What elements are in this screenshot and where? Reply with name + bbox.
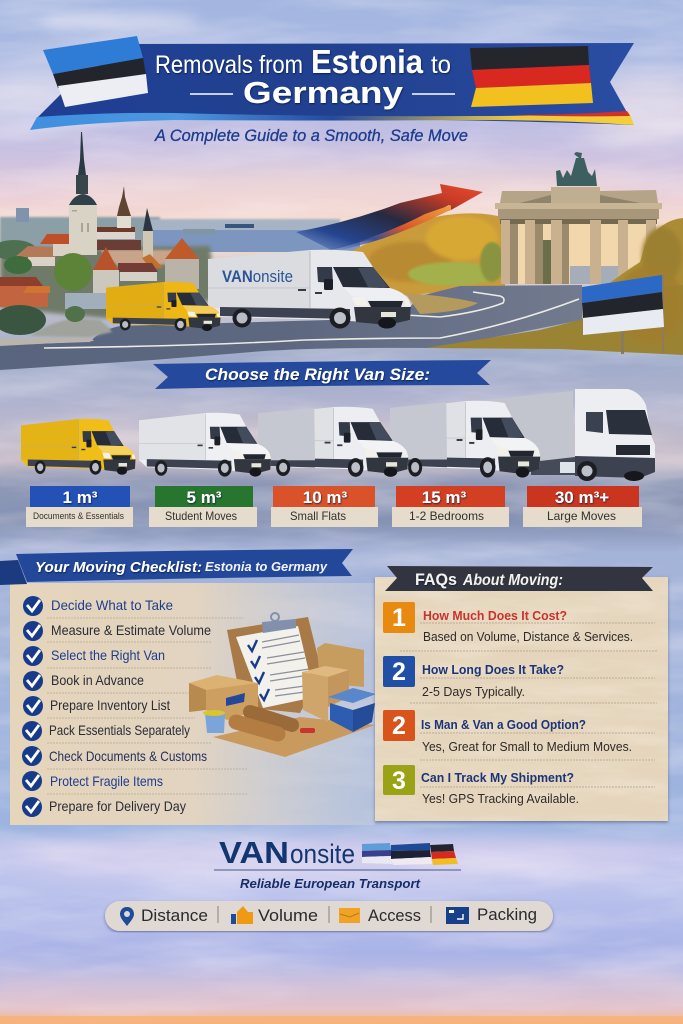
size card 15 m3: 15 m³ [422, 488, 467, 507]
ribbon [37, 43, 634, 125]
ribbon heading [153, 360, 491, 389]
check item: Measure & Estimate Volume: Measure & Estimate Volume [51, 622, 211, 638]
check item: Prepare Inventory List [23, 696, 170, 716]
title line 1: Removals from [155, 51, 303, 79]
footer logo [214, 835, 461, 891]
size card 1 m3: 1 m³ [63, 488, 98, 507]
FAQ 1 [383, 602, 633, 644]
second spire [117, 186, 131, 228]
section: choose the right van size [21, 360, 655, 527]
orange buildings left [0, 277, 50, 307]
check item: Measure & Estimate Volume [23, 621, 211, 641]
ribbon lower edge [30, 112, 634, 130]
Estonian flag [43, 36, 148, 107]
mid roofs [118, 254, 163, 281]
box van 15 m3 [390, 401, 540, 478]
size card 30 m3+: Large Moves [547, 509, 616, 523]
check item: Prepare for Delivery Day: Prepare for Delivery Day [49, 798, 186, 814]
trees and rocks [0, 253, 112, 337]
checklist heading ribbon [0, 549, 353, 585]
yellow van 1 m3 [21, 419, 135, 475]
check item: Pack Essentials Separately: Pack Essentials Separately [49, 722, 190, 738]
right trees [600, 218, 683, 352]
subtitle: A Complete Guide to a Smooth, Safe Move [154, 126, 468, 145]
title banner [30, 36, 634, 130]
paper texture [375, 577, 668, 821]
check item: Check Documents & Customs [22, 746, 207, 766]
check item: Book in Advance: Book in Advance [51, 672, 144, 688]
size card 5 m3: Student Moves [165, 509, 237, 523]
size card 15 m3 [392, 486, 509, 527]
FAQ 4: 3 [392, 767, 406, 795]
FAQ 4: Yes! GPS Tracking Available. [422, 791, 579, 806]
check item: Protect Fragile Items: Protect Fragile Items [50, 773, 163, 789]
size card 10 m3: 10 m³ [303, 488, 348, 507]
check item: Select the Right Van: Select the Right Van [51, 647, 165, 663]
check item: Prepare Inventory List: Prepare Inventory List [50, 697, 170, 713]
red accent [514, 111, 630, 116]
main church tower [69, 132, 97, 255]
red-blue direction arrow [296, 184, 483, 250]
left roofs [28, 257, 55, 266]
size card 30 m3+: 30 m³+ [555, 488, 609, 507]
ribbon heading: Choose the Right Van Size: [205, 365, 430, 384]
Access: Access [368, 906, 421, 925]
FAQ heading ribbon: About Moving: [462, 572, 563, 589]
size card 5 m3 [149, 486, 257, 527]
truck 30 m3 [483, 389, 655, 481]
illustration: clipboard and boxes [189, 613, 376, 757]
check item: Pack Essentials Separately [22, 721, 190, 741]
size card 10 m3: Small Flats [290, 509, 346, 523]
Brandenburg Gate [495, 152, 662, 284]
FAQ 1: How Much Does It Cost? [423, 608, 567, 623]
FAQ 2: How Long Does It Take? [422, 662, 564, 677]
sea and distant shore [0, 208, 360, 252]
FAQ 3: Yes, Great for Small to Medium Moves. [422, 739, 632, 754]
Distance: Distance [141, 906, 208, 925]
third tower [143, 208, 153, 260]
Estonian flag on pole [582, 275, 664, 354]
small blue buildings [65, 293, 107, 309]
Volume: Volume [258, 906, 318, 925]
Volume [231, 906, 318, 925]
autumn hill [350, 213, 505, 296]
title line 1: Estonia [311, 43, 424, 80]
check item: Book in Advance [23, 671, 144, 691]
FAQ 3: 2 [392, 712, 406, 740]
size card 30 m3+ [523, 486, 642, 527]
box van 10 m3 [258, 407, 408, 477]
FAQ heading ribbon: FAQs [415, 570, 457, 589]
white VANonsite van [208, 250, 411, 328]
Tallinn old town [0, 132, 215, 337]
Access [339, 906, 421, 925]
size card 15 m3: 1-2 Bedrooms [409, 509, 484, 523]
paper background [10, 583, 375, 825]
FAQ 2: 2 [392, 658, 406, 686]
FAQ 4 [383, 765, 579, 806]
quadriga statue [556, 152, 597, 186]
title line 1: to [431, 51, 451, 79]
flag ribbon [362, 843, 458, 865]
brand name: VAN [219, 835, 289, 870]
checklist heading ribbon: Estonia to Germany [205, 559, 328, 574]
panel: FAQs about moving [375, 566, 668, 821]
FAQ 3 [383, 710, 632, 754]
title rules [190, 93, 455, 95]
check item: Protect Fragile Items [22, 771, 163, 791]
factor pill bar [105, 901, 553, 931]
FAQ 1: Based on Volume, Distance & Services. [423, 629, 633, 644]
divider lines [400, 623, 657, 787]
panel: moving checklist [0, 549, 376, 825]
Packing: Packing [477, 905, 537, 924]
right grass verge [425, 265, 683, 355]
size card 5 m3: 5 m³ [187, 488, 222, 507]
FAQ 2: 2-5 Days Typically. [422, 684, 525, 699]
check item: Decide What to Take: Decide What to Take [51, 597, 173, 613]
check item: Check Documents & Customs: Check Documents & Customs [49, 748, 207, 764]
FAQ 2 [383, 656, 564, 699]
German flag [470, 46, 593, 107]
yellow van [106, 282, 220, 331]
brand name: onsite [290, 839, 355, 869]
size card 1 m3 [26, 486, 133, 527]
FAQ 4: Can I Track My Shipment? [421, 770, 574, 785]
white van 5 m3 [139, 413, 271, 477]
size card 1 m3: Documents & Essentials [33, 511, 124, 522]
tagline: Reliable European Transport [240, 876, 421, 891]
FAQ 1: 1 [392, 604, 406, 632]
red roof towers [93, 238, 199, 294]
scene: Tallinn to Berlin panorama [0, 132, 683, 370]
title line 2: Germany [243, 75, 404, 110]
check item: Prepare for Delivery Day [22, 797, 186, 817]
road [0, 285, 582, 370]
van logo: VANonsite [222, 267, 293, 286]
FAQ 3: Is Man & Van a Good Option? [421, 717, 586, 732]
size card 10 m3 [271, 486, 378, 527]
FAQ heading ribbon [385, 566, 653, 591]
Packing [446, 905, 537, 924]
paper background [375, 577, 668, 821]
divider lines [47, 618, 248, 794]
check item: Select the Right Van [23, 646, 165, 666]
check item: Decide What to Take [23, 596, 173, 616]
checklist heading ribbon: Your Moving Checklist: [35, 559, 202, 576]
